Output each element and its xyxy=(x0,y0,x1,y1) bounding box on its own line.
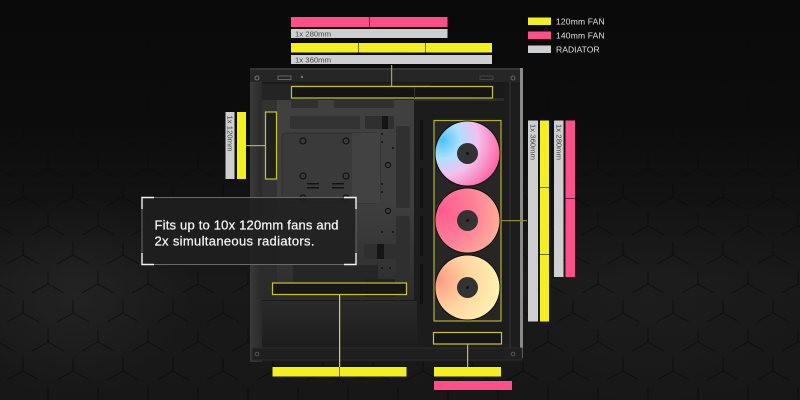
callout text: 2x simultaneous radiators. xyxy=(154,234,314,248)
120mm fan bar right xyxy=(540,120,549,322)
fan column backing xyxy=(414,98,504,348)
360mm radiator bar top xyxy=(291,55,492,64)
280mm radiator bar top: 1x 280mm xyxy=(295,30,331,38)
140mm fan bar right xyxy=(566,120,575,277)
legend: 120mm fan: 120mm FAN xyxy=(556,16,605,26)
top mount box xyxy=(292,86,492,98)
top radiator and fans indicator xyxy=(291,17,492,98)
280mm radiator bar right: 1x 280mm xyxy=(554,124,564,160)
360mm radiator bar top: 1x 360mm xyxy=(295,56,331,64)
bottom mount box left xyxy=(272,283,406,294)
360mm radiator bar right: 1x 360mm xyxy=(528,124,538,160)
280mm radiator bar top xyxy=(291,29,448,38)
right rail xyxy=(504,68,523,358)
case bottom bar xyxy=(252,348,522,360)
connector left xyxy=(246,145,265,146)
callout text: Fits up to 10x 120mm fans and xyxy=(154,218,338,232)
140mm fan bar top xyxy=(291,17,448,27)
side mount indicator xyxy=(226,112,276,179)
connector bottom left xyxy=(339,295,340,367)
120mm fan bar left xyxy=(237,112,246,179)
motherboard plate xyxy=(262,84,430,300)
connector top xyxy=(391,65,392,86)
fan: pink xyxy=(434,188,500,254)
callout xyxy=(142,198,356,264)
connector right xyxy=(501,220,527,221)
legend xyxy=(528,16,605,54)
left rail xyxy=(250,82,262,362)
120mm fan bar top xyxy=(291,43,492,52)
right bars xyxy=(528,120,575,322)
callout text xyxy=(154,218,338,248)
bottom fan bar left xyxy=(272,367,406,376)
case top bar xyxy=(250,68,523,82)
360mm radiator bar right xyxy=(528,120,538,322)
pc case xyxy=(250,68,523,362)
legend: radiator: RADIATOR xyxy=(556,44,600,54)
bottom indicators xyxy=(272,283,512,390)
fan: blue pink xyxy=(434,120,500,186)
fan: peach xyxy=(434,254,500,320)
bottom pink bar xyxy=(434,381,512,390)
legend: 140mm fan: 140mm FAN xyxy=(556,30,605,40)
connector bottom right xyxy=(467,344,468,367)
bottom mount box right xyxy=(434,332,502,344)
280mm radiator bar right xyxy=(554,120,564,277)
left mount box xyxy=(266,112,276,179)
120mm radiator bar left: 1x 120mm xyxy=(226,116,234,152)
bottom fan bar right xyxy=(434,367,501,376)
fan frame xyxy=(434,120,501,321)
fans xyxy=(434,120,527,321)
power supply shroud xyxy=(262,301,417,348)
